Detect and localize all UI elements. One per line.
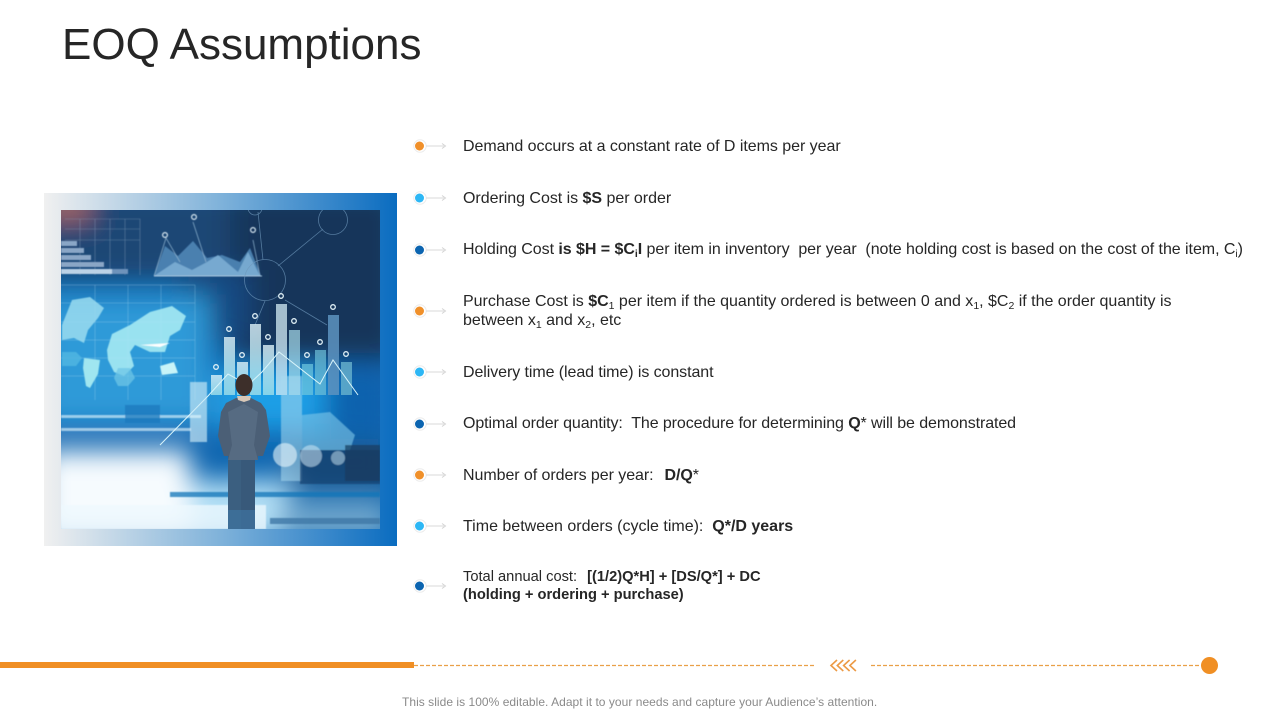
area chart — [154, 215, 262, 276]
bullet 6 — [414, 417, 446, 431]
bullet 7 — [414, 468, 446, 482]
gradient frame — [44, 193, 397, 546]
world map — [61, 285, 195, 400]
text 1: Demand occurs at a constant rate of D items per year — [463, 138, 841, 155]
network circles — [244, 201, 348, 325]
chevrons — [831, 660, 856, 671]
bullet 5 — [414, 365, 446, 379]
title: EOQ Assumptions — [62, 20, 421, 69]
city and light streaks — [61, 376, 380, 529]
bullet 3 — [414, 243, 446, 257]
small horizontal bar chart — [61, 219, 140, 275]
bullet 9 — [414, 579, 446, 593]
text 4: between x1 and x2, etc — [463, 312, 621, 331]
footer note: This slide is 100% editable. Adapt it to your needs and capture your Audience’s attention. — [402, 695, 877, 709]
text 6: Optimal order quantity: The procedure for determining Q* will be demonstrated — [463, 415, 1016, 432]
text 4 — [463, 293, 1171, 331]
text 5: Delivery time (lead time) is constant — [463, 364, 713, 381]
bullet 2 — [414, 191, 446, 205]
bar chart with pins — [160, 294, 358, 445]
text 4: Purchase Cost is $C1 per item if the quantity ordered is between 0 and x1, $C2 if the order quantity is — [463, 293, 1171, 312]
bullet 4 — [414, 304, 446, 318]
picture: businessman viewing data dashboards — [44, 193, 397, 546]
blurred colour field — [61, 210, 380, 529]
footer progress line — [0, 657, 1218, 674]
text 2: Ordering Cost is $S per order — [463, 190, 671, 207]
text 9 — [463, 569, 761, 603]
businessman — [218, 374, 270, 529]
text 7: Number of orders per year: D/Q* — [463, 467, 699, 484]
bullet 8 — [414, 519, 446, 533]
text 8: Time between orders (cycle time): Q*/D years — [463, 518, 793, 535]
text 9: (holding + ordering + purchase) — [463, 587, 684, 603]
bullet 1 — [414, 139, 446, 153]
text 9: Total annual cost: [(1/2)Q*H] + [DS/Q*] + DC — [463, 569, 761, 585]
text 3: Holding Cost is $H = $CiI per item in inventory per year (note holding cost is based on the cost of the item, Ci) — [463, 241, 1243, 260]
